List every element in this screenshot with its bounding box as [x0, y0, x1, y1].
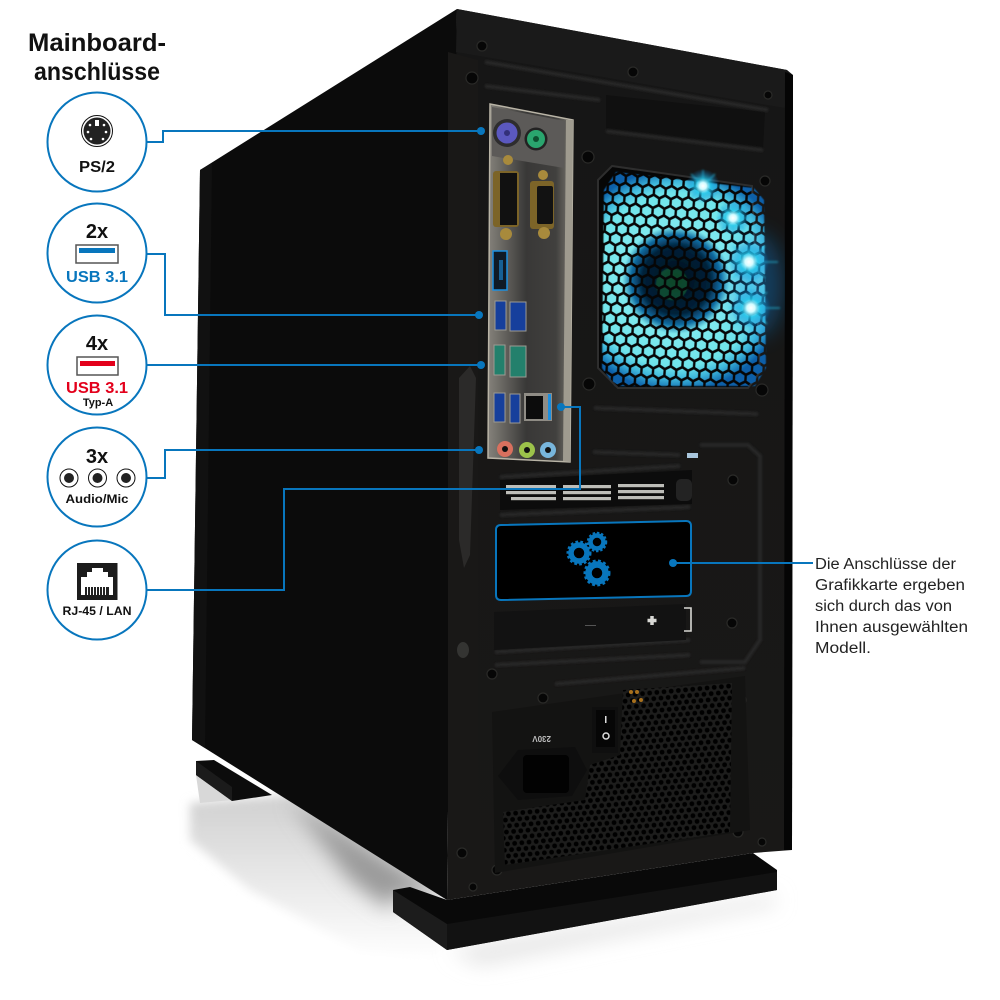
- computer case: [192, 9, 793, 900]
- main case foot: [393, 853, 777, 950]
- icon: USB port blue: [76, 245, 118, 263]
- back panel: [447, 9, 793, 900]
- shield plate: [488, 104, 573, 462]
- rear I/O shield: [488, 104, 573, 462]
- panel heading: anschlüsse: [34, 58, 160, 86]
- back panel top rim: [456, 9, 787, 108]
- count: 4x: [86, 333, 108, 355]
- fan frame: [598, 166, 760, 388]
- LED glow lights: [686, 169, 783, 337]
- sub label: Typ-A: [83, 397, 113, 409]
- connector end dots: [475, 127, 677, 567]
- bracket latch: [676, 479, 692, 501]
- screws: [457, 41, 772, 891]
- icon: gears: [568, 533, 609, 585]
- VGA port: [530, 170, 554, 239]
- graphics card note: Ihnen ausgewählten: [815, 619, 968, 636]
- small highlight: [457, 642, 469, 658]
- icon: USB port red: [77, 357, 118, 375]
- USB teal ports: [494, 345, 526, 377]
- icon: audio jacks: [60, 469, 135, 487]
- icon: RJ-45 socket: [77, 563, 118, 600]
- PS/2 green port: [524, 128, 548, 150]
- count: 3x: [86, 446, 108, 468]
- lower blank slot cover: [494, 604, 691, 650]
- PS/2 purple port: [493, 119, 521, 147]
- left strip: [448, 52, 478, 900]
- shield top area: [492, 107, 565, 168]
- badge: 3x Audio/Mic: [48, 428, 146, 526]
- power supply: [492, 676, 750, 873]
- placeholder box: [496, 521, 691, 600]
- vented slot cover: [500, 453, 698, 510]
- badge: PS/2: [48, 92, 146, 192]
- perforated grille: [503, 683, 732, 865]
- side panel left edge: [192, 163, 212, 748]
- fan grille with blue lighting: [598, 166, 783, 388]
- graphics card placeholder: [496, 521, 691, 600]
- floor shadow reflection: [190, 775, 775, 965]
- power switch: [592, 707, 618, 753]
- label: Audio/Mic: [66, 492, 129, 506]
- graphics card note: Grafikkarte ergeben: [815, 577, 965, 594]
- embossed ridges: [485, 62, 768, 684]
- label: USB 3.1: [66, 269, 128, 286]
- audio jacks: [497, 441, 556, 458]
- power socket: [498, 747, 587, 800]
- badge: 2x USB 3.1: [48, 204, 146, 302]
- honeycomb cells: [602, 172, 766, 386]
- HDMI port: [493, 251, 507, 290]
- badge: 4x USB 3.1 Typ-A: [48, 316, 146, 414]
- back right edge: [784, 72, 793, 850]
- label: PS/2: [79, 159, 115, 176]
- USB 3.1 blue ports: [494, 301, 526, 423]
- shield right rim: [563, 120, 573, 462]
- graphics card note: [815, 556, 968, 657]
- badge: RJ-45 / LAN: [48, 540, 146, 640]
- side panel: [192, 9, 457, 900]
- graphics card note: sich durch das von: [815, 598, 952, 615]
- side handle ridge: [459, 366, 476, 568]
- label: RJ-45 / LAN: [62, 604, 132, 618]
- label: USB 3.1: [66, 380, 128, 397]
- PSU plate: [492, 676, 750, 873]
- panel heading: [28, 29, 166, 86]
- connector lines: [147, 131, 813, 590]
- count: 2x: [86, 221, 108, 243]
- icon: PS/2 connector: [82, 116, 112, 146]
- top recessed bracket: [606, 95, 765, 150]
- left case foot: [196, 760, 272, 801]
- warm internal specks: [629, 690, 643, 703]
- graphics card note: Modell.: [815, 640, 871, 657]
- graphics card note: Die Anschlüsse der: [815, 556, 956, 573]
- latch tag: [687, 453, 698, 458]
- panel heading: Mainboard-: [28, 29, 166, 57]
- RJ-45 port: [524, 393, 552, 421]
- DVI port: [493, 155, 519, 240]
- voltage label: 230V: [532, 734, 551, 743]
